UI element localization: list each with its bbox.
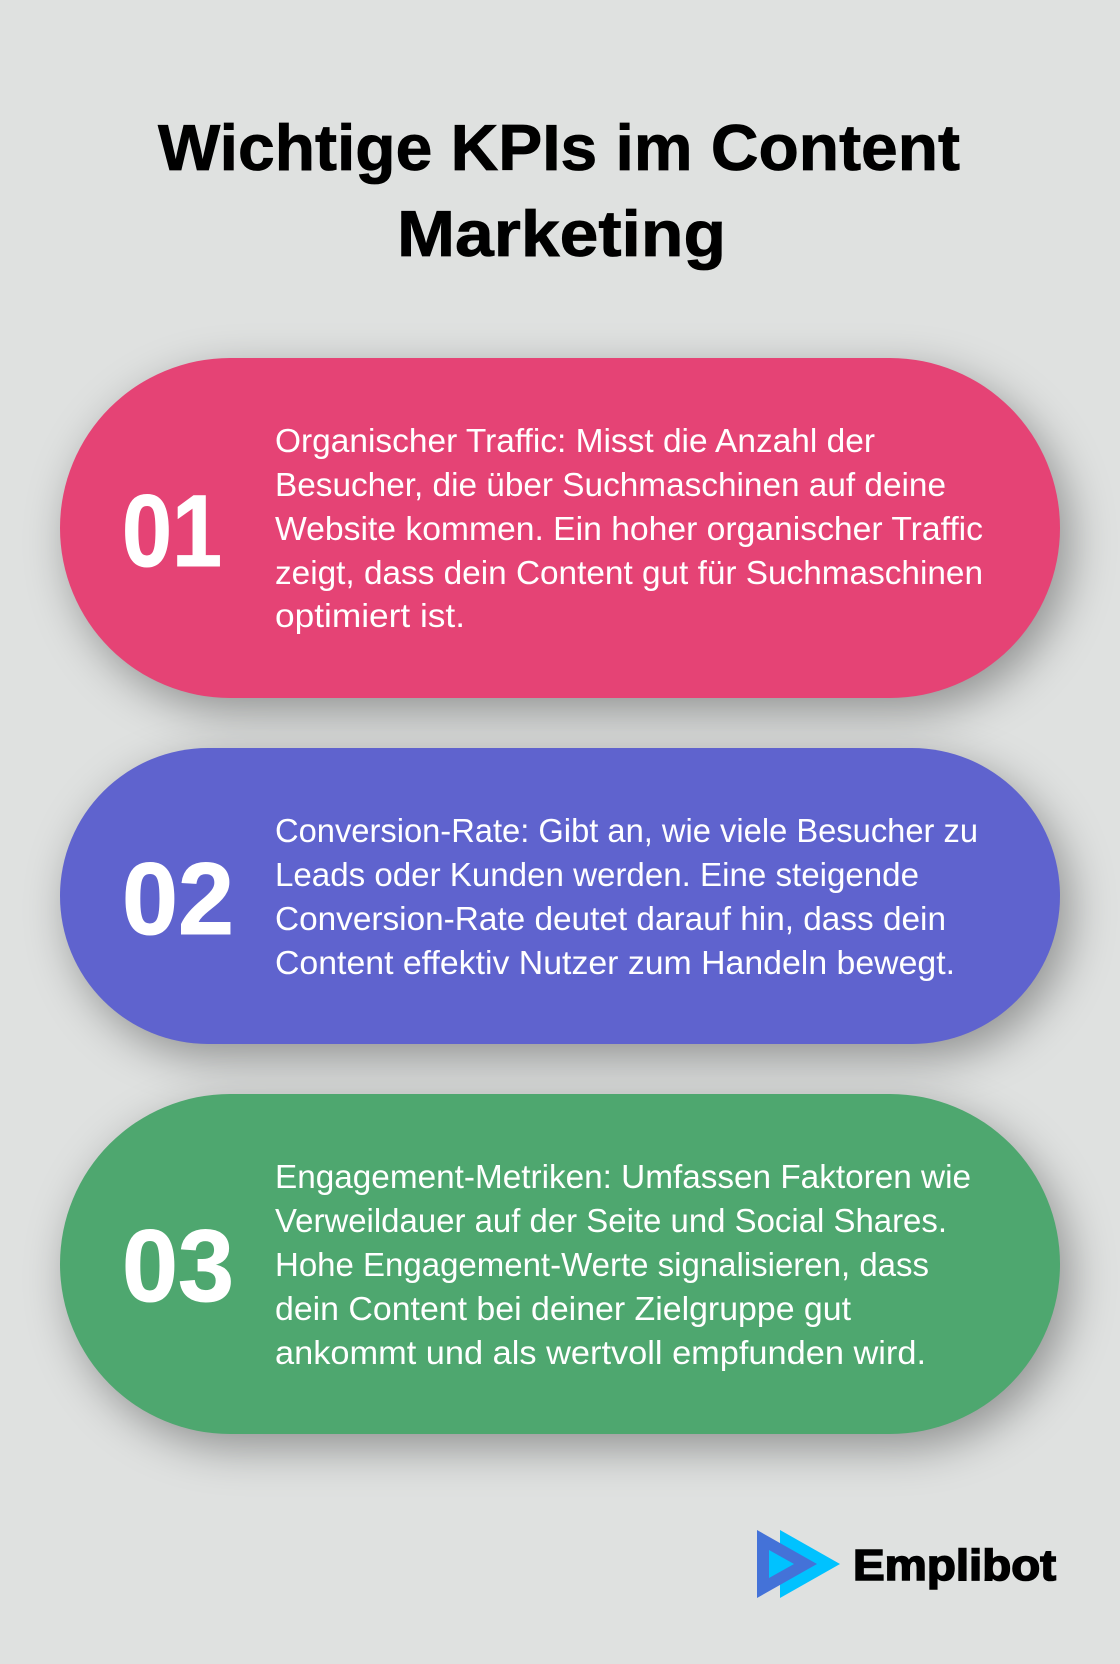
text: organic traffic description: Organischer Traffic: Misst die Anzahl der xyxy=(275,422,875,459)
text: engagement description xyxy=(275,1158,971,1371)
icon: double play triangles xyxy=(757,1530,840,1598)
panel: KPI 01 organic traffic xyxy=(60,358,1060,698)
text: engagement description: Hohe Engagement-Werte signalisieren, dass xyxy=(275,1246,929,1283)
logo: Emplibot xyxy=(757,1530,1056,1598)
text: organic traffic description: Besucher, die über Suchmaschinen auf deine xyxy=(275,466,946,503)
text: conversion rate description: Conversion-Rate: Gibt an, wie viele Besucher zu xyxy=(275,812,978,849)
text: conversion rate description: Content effektiv Nutzer zum Handeln bewegt. xyxy=(275,944,955,981)
text: organic traffic description: Website kommen. Ein hoher organischer Traffic xyxy=(275,510,983,547)
text: organic traffic description: zeigt, dass dein Content gut für Suchmaschinen xyxy=(275,554,983,591)
text: engagement description: ankommt und als wertvoll empfunden wird. xyxy=(275,1334,926,1371)
text: engagement description: dein Content bei deiner Zielgruppe gut xyxy=(275,1290,851,1327)
text: conversion rate description xyxy=(275,812,978,981)
panel: KPI 02 conversion rate xyxy=(60,748,1060,1044)
text: organic traffic description xyxy=(275,422,983,634)
panel: KPI 03 engagement metrics xyxy=(60,1094,1060,1434)
title xyxy=(158,111,960,270)
title: Marketing xyxy=(397,197,726,270)
number 03: 03 xyxy=(122,1209,234,1323)
number 02: 02 xyxy=(122,842,234,956)
text: engagement description: Engagement-Metriken: Umfassen Faktoren wie xyxy=(275,1158,971,1195)
wordmark: Emplibot xyxy=(853,1541,1056,1590)
title: Wichtige KPIs im Content xyxy=(158,111,960,184)
number 01: 01 xyxy=(122,474,222,588)
text: conversion rate description: Leads oder Kunden werden. Eine steigende xyxy=(275,856,919,893)
text: conversion rate description: Conversion-Rate deutet darauf hin, dass dein xyxy=(275,900,946,937)
text: organic traffic description: optimiert ist. xyxy=(275,597,465,634)
text: engagement description: Verweildauer auf der Seite und Social Shares. xyxy=(275,1202,947,1239)
